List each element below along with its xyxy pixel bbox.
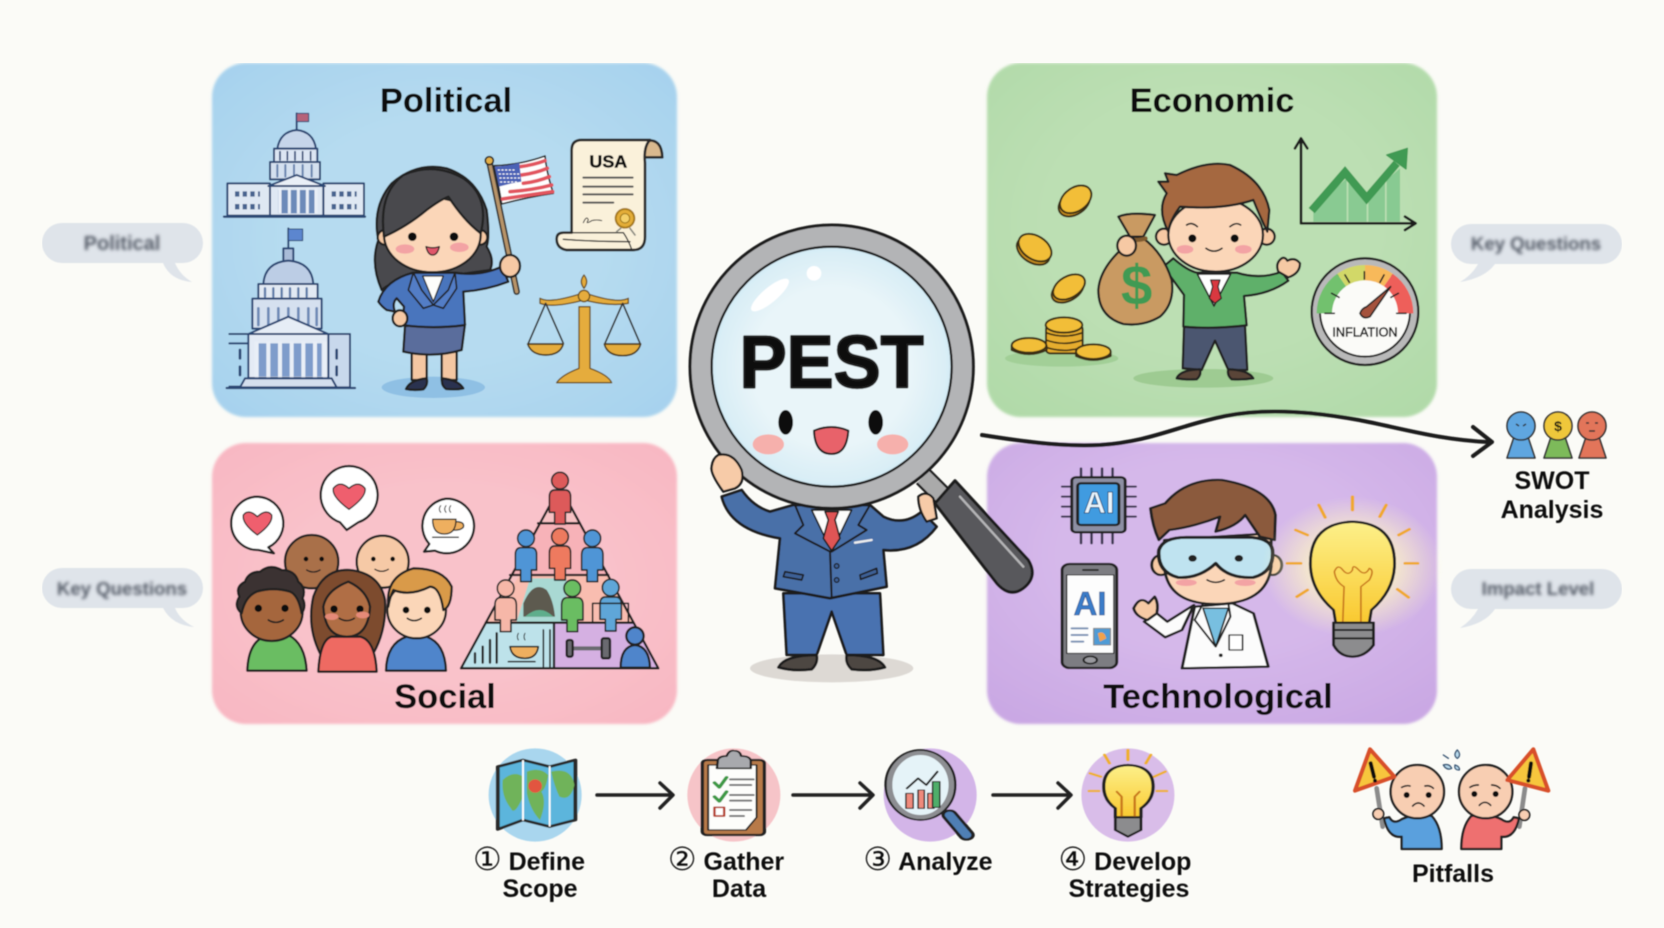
icon: worried figures with warning signs (1355, 749, 1548, 849)
arrow: step 2 to 3 (793, 783, 873, 808)
icon: glowing light bulb (1262, 497, 1443, 657)
heading: economic: Economic (1130, 82, 1294, 120)
label: step 4: ④ Develop (1059, 841, 1191, 877)
speech bubbles (231, 466, 474, 553)
heading: social: Social (394, 678, 496, 716)
icon: clipboard checklist (687, 748, 780, 842)
icon: strategy light bulb (1081, 748, 1174, 842)
economic illustrations (1005, 138, 1418, 388)
dollar mark on SWOT figure: $ (1554, 418, 1562, 434)
icon: world map (489, 748, 582, 842)
heading: technological: Technological (1103, 678, 1333, 716)
arrow: step 3 to 4 (993, 783, 1071, 808)
magnifier lens and ring (690, 225, 973, 508)
label: Pitfalls: Pitfalls (1412, 860, 1494, 888)
arrow: PEST to SWOT (982, 411, 1492, 456)
icon: AI chip (1062, 468, 1136, 543)
icon: three SWOT figures (1507, 412, 1606, 458)
technology illustrations (1062, 468, 1443, 668)
label: PEST: PEST (740, 320, 924, 404)
mascot body in suit (722, 490, 937, 682)
label: step 1 second line: Scope (502, 875, 578, 903)
political illustrations (224, 113, 662, 398)
central figure: PEST magnifying glass mascot (690, 225, 1032, 682)
icon: small capitol building (224, 113, 365, 217)
label: SWOT Analysis: SWOT (1514, 467, 1590, 495)
icon: USA document scroll: USA (589, 152, 627, 172)
callout: Key Questions right: Key Questions (1471, 233, 1601, 254)
figure: businessman with money bag: $ (1121, 255, 1152, 318)
icon: analysis magnifier (884, 748, 977, 842)
economic panel background (987, 63, 1437, 417)
label: step 4 second line: Strategies (1069, 875, 1189, 903)
arrow: step 1 to 2 (597, 783, 673, 808)
label: step 1: ① Define (473, 841, 585, 877)
pitfalls block (1355, 749, 1548, 888)
label: step 2 second line: Data (712, 875, 767, 903)
process steps (473, 748, 1191, 903)
heading: political: Political (380, 82, 512, 120)
callout: Political: Political (84, 233, 160, 255)
icon: gold coins (1005, 180, 1118, 367)
icon: large capitol building (227, 228, 355, 388)
social panel background (212, 443, 677, 724)
hands holding magnifier (711, 454, 937, 522)
callout: Key Questions left: Key Questions (57, 578, 187, 599)
figures: diverse group of people (237, 535, 452, 672)
icon: scales of justice (528, 275, 641, 383)
callout: Impact Level (1451, 569, 1622, 628)
callout: Political (42, 223, 203, 282)
political panel background (212, 63, 677, 417)
panel: technological (987, 443, 1443, 724)
panel: political (212, 63, 677, 417)
icon: rising line chart (1295, 138, 1416, 230)
icon: smartphone (1062, 564, 1117, 668)
panel: social (212, 443, 677, 724)
callout: Impact Level: Impact Level (1482, 578, 1594, 599)
mascot face (753, 410, 908, 454)
icon: inflation gauge (1312, 258, 1418, 365)
SWOT analysis block (1501, 412, 1606, 524)
figure: woman with flag (375, 156, 553, 398)
label: SWOT Analysis second line: Analysis (1501, 496, 1603, 524)
callout: Key Questions right (1451, 224, 1622, 282)
technological panel background (987, 443, 1437, 724)
label: step 3: ③ Analyze (863, 841, 993, 877)
icon: inflation gauge: INFLATION (1332, 326, 1398, 340)
callout: Key Questions left (42, 568, 203, 627)
label: AI on chip: AI (1084, 485, 1114, 520)
figure: businessman with money bag (1098, 164, 1300, 388)
chart: social pyramid (461, 472, 658, 668)
figure: scientist with goggles (1134, 480, 1282, 668)
label: step 2: ② Gather (668, 841, 784, 877)
social illustrations (231, 466, 658, 672)
icon: USA document scroll (557, 140, 662, 250)
step icons (489, 748, 1174, 842)
panel: economic (987, 63, 1437, 417)
label: AI on phone: AI (1074, 585, 1106, 622)
magnifier handle (923, 477, 1032, 592)
